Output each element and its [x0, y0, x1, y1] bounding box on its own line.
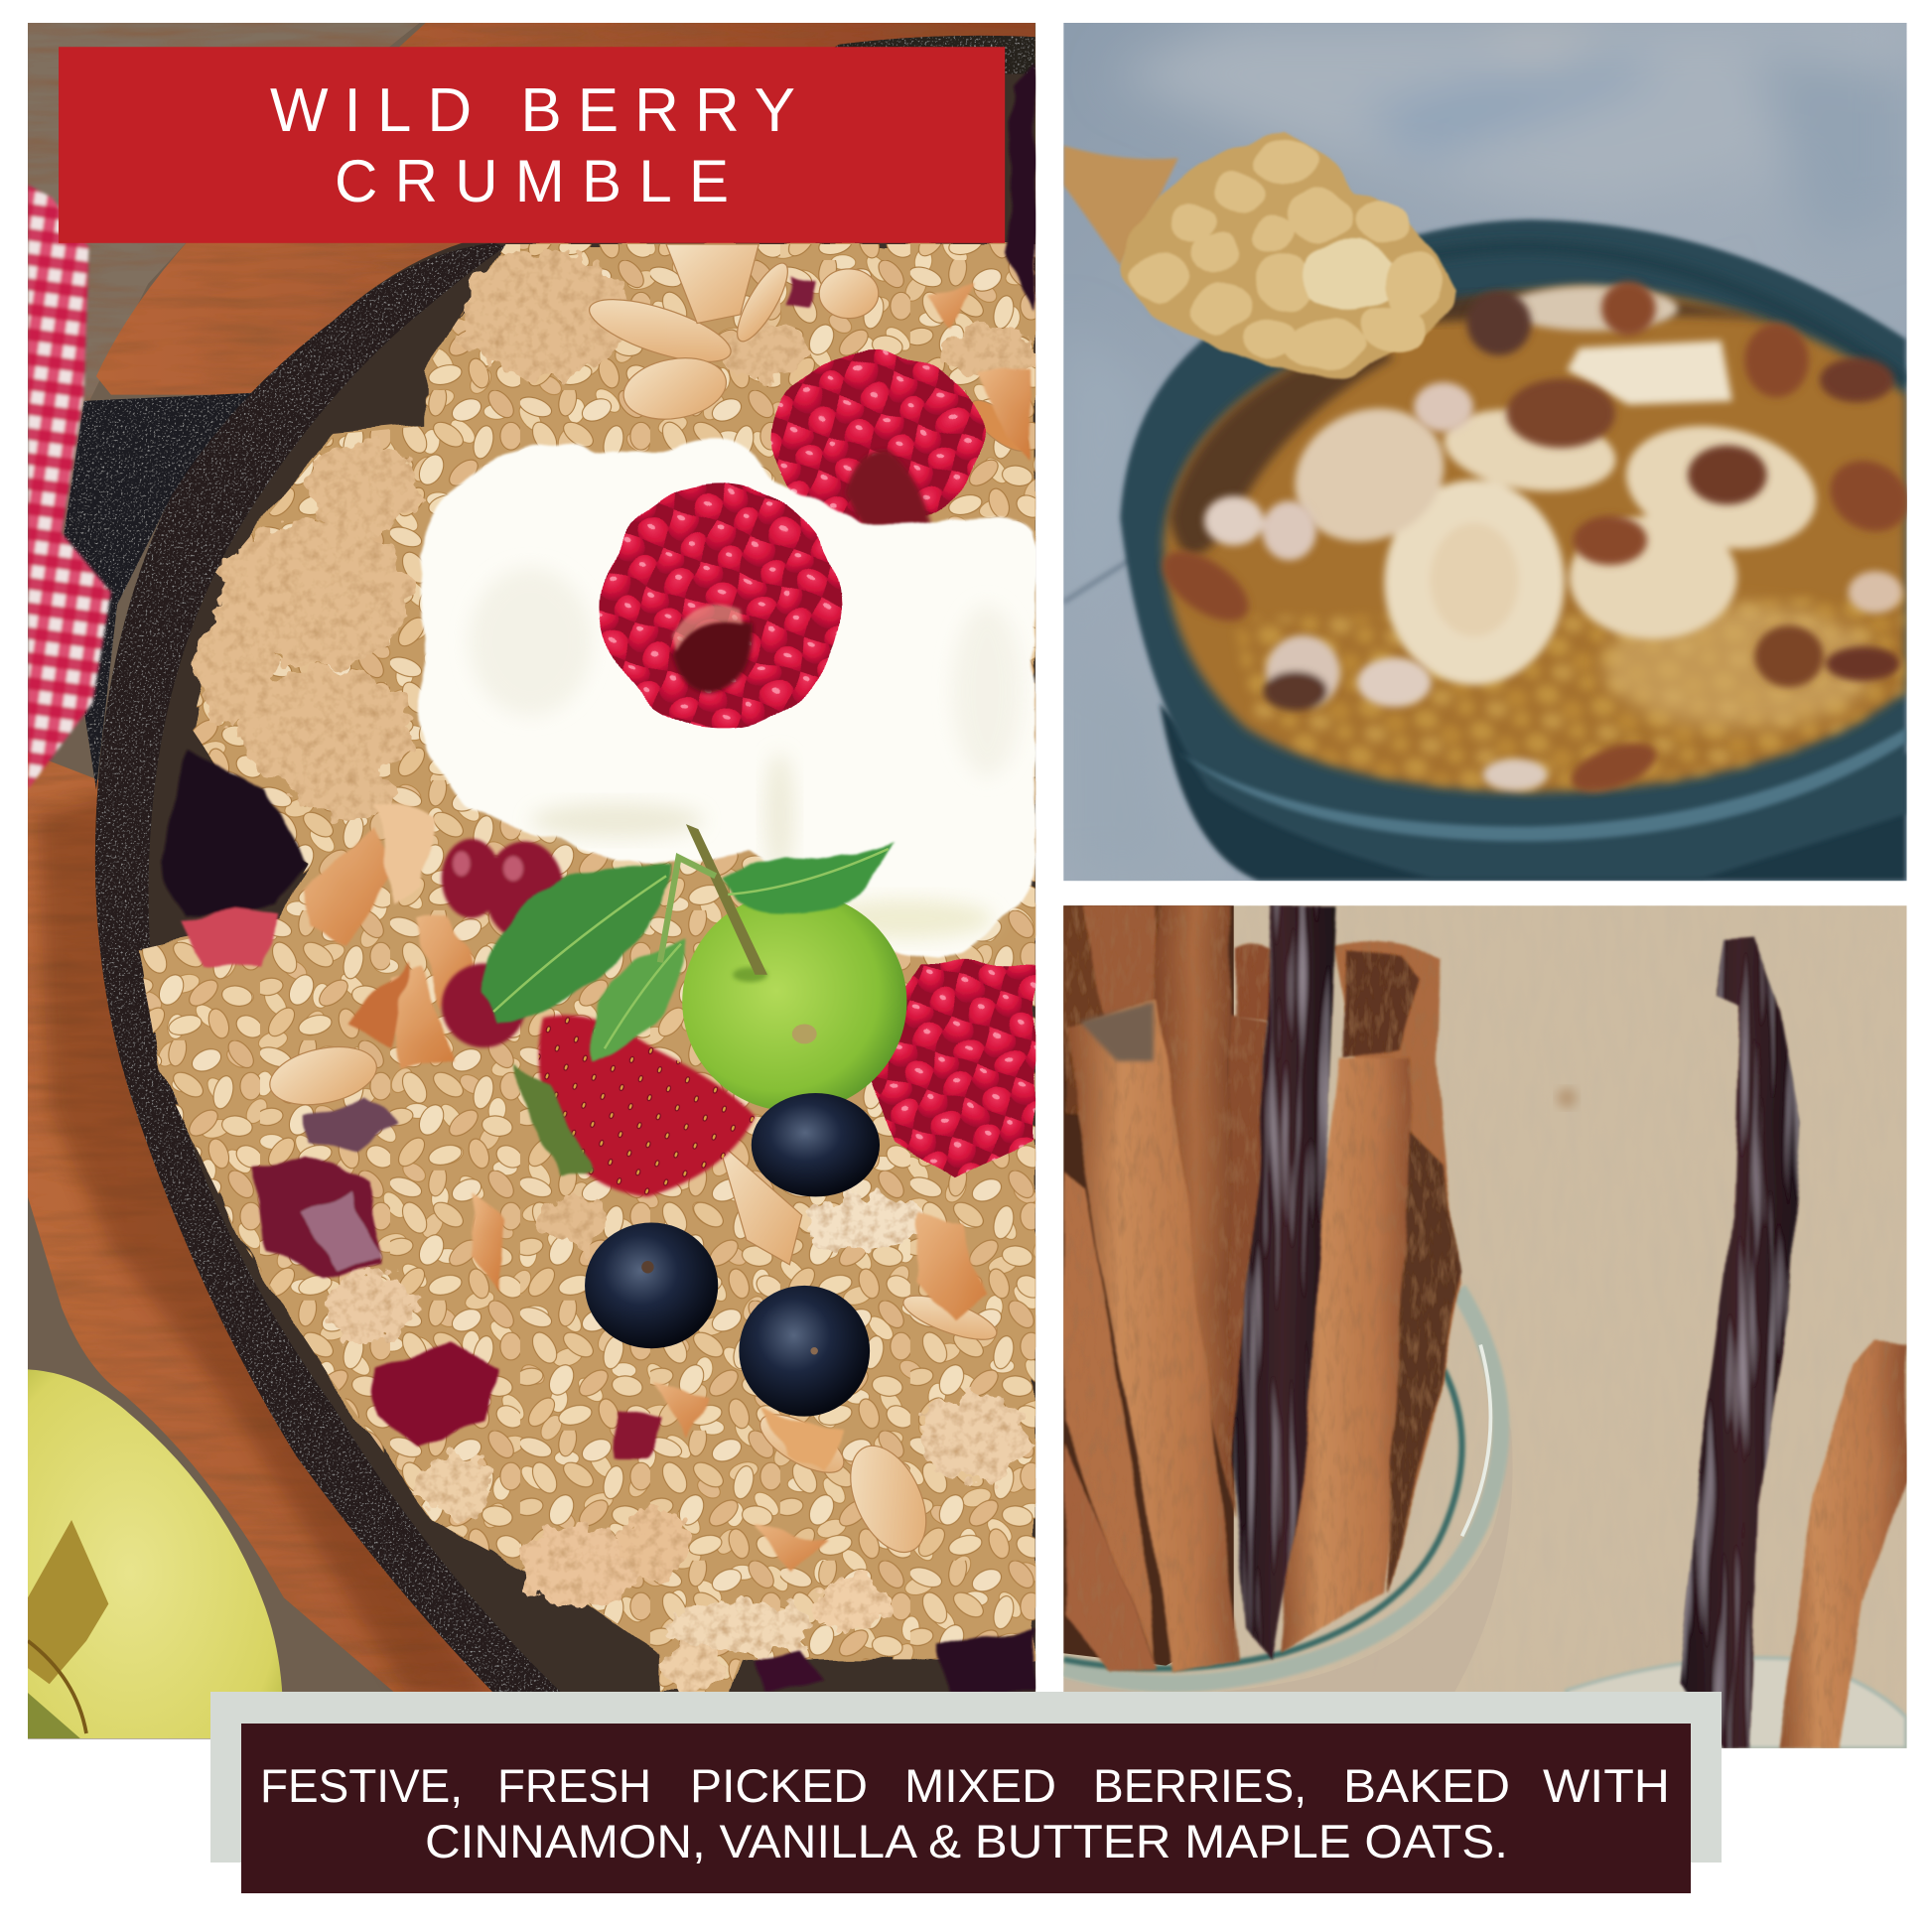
banana slices — [1273, 286, 1828, 685]
caption text: WITH — [1543, 1759, 1670, 1812]
caption text: FESTIVE, — [260, 1759, 463, 1812]
raspberry top right — [769, 352, 982, 528]
vanilla bean right — [1678, 937, 1801, 1748]
cast iron pan — [65, 36, 1035, 1693]
caption text: BAKED — [1343, 1759, 1510, 1812]
panel: cinnamon and vanilla photo — [1063, 905, 1907, 1748]
red currants — [442, 839, 564, 1047]
wooden spoon — [1063, 146, 1178, 265]
title: WILD BERRY — [270, 76, 795, 145]
cinnamon sticks in jar — [1063, 905, 1459, 1672]
raspberry on ice cream — [602, 484, 839, 729]
panel: oatmeal bowl photo — [1063, 23, 1921, 881]
caption backdrop — [210, 1692, 1722, 1863]
title — [270, 76, 795, 214]
caption text: MIXED — [904, 1759, 1056, 1812]
raspberry right — [864, 962, 1035, 1178]
oat crumble topping — [123, 62, 1035, 1703]
caption text: CINNAMON, VANILLA & BUTTER MAPLE OATS. — [425, 1815, 1508, 1867]
caption text: FRESH — [497, 1759, 651, 1812]
toasted coconut flakes — [302, 284, 1031, 1573]
spoonful of oats — [1124, 133, 1453, 377]
vanilla bean in jar — [1231, 905, 1336, 1659]
almond slices — [264, 244, 1035, 1564]
cinnamon stick right — [1776, 1338, 1906, 1748]
second jar — [1567, 1658, 1906, 1748]
strawberry — [515, 1015, 756, 1196]
caption box — [241, 1724, 1691, 1893]
caption text: BERRIES, — [1093, 1759, 1307, 1812]
oatmeal surface — [1164, 286, 1906, 792]
gingham towel — [28, 185, 111, 789]
caption text: PICKED — [690, 1759, 868, 1812]
teal bowl — [1120, 219, 1906, 881]
blueberries — [585, 1093, 880, 1417]
crumble clusters — [195, 250, 1034, 1690]
glass jar — [1063, 1290, 1513, 1748]
cutting board — [28, 23, 1035, 1703]
panel: wild berry crumble photo — [28, 23, 1035, 1739]
caption text — [260, 1759, 1670, 1867]
title: CRUMBLE — [335, 148, 729, 214]
green apple — [682, 892, 906, 1112]
berry juice pockets — [161, 62, 1035, 1693]
ice cream scoops — [417, 438, 1035, 956]
pecans — [1151, 281, 1921, 801]
mint sprig — [482, 824, 895, 1058]
red title banner — [59, 47, 1005, 243]
yellow apple — [28, 1369, 283, 1738]
